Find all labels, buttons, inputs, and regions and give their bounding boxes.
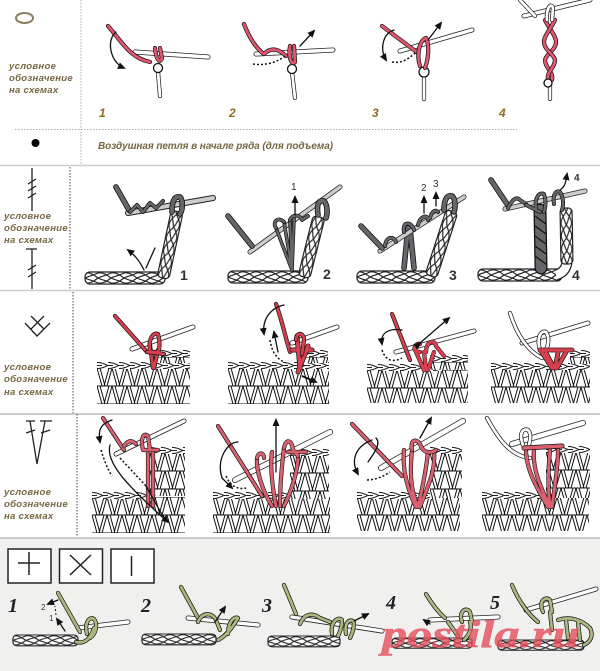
step number: 1: [8, 595, 18, 617]
step number: 1: [180, 267, 188, 283]
step number: 3: [449, 267, 457, 283]
step 1: [8, 593, 128, 646]
icon: double crochet symbols: [26, 168, 37, 289]
arrow labels: [421, 179, 439, 194]
panel: double crochet increase row: [0, 414, 600, 537]
caption: symbol on diagrams: условное: [3, 211, 52, 222]
icon: chain stitch oval symbol: [16, 13, 33, 23]
step number: 5: [490, 592, 500, 614]
step 4: [385, 592, 498, 648]
icon: two double crochets from one base: [26, 421, 52, 464]
caption: symbol on diagrams: на схемах: [4, 387, 54, 398]
panel: single crochet decrease row: [0, 290, 600, 414]
step 4: [491, 313, 590, 403]
arrow labels: 2: [421, 183, 427, 194]
caption: symbol on diagrams: обозначение: [9, 73, 73, 84]
caption: symbol on diagrams: на схемах: [4, 235, 54, 246]
caption: symbol on diagrams: на схемах: [4, 511, 54, 522]
arrow label: 1: [291, 182, 297, 193]
text: turning chain note: Воздушная петля в начале ряда (для подъема): [98, 141, 334, 152]
caption: symbol on diagrams: обозначение: [4, 374, 68, 385]
icon: turning chain dot: [32, 139, 40, 147]
icon: cross symbol box: [60, 549, 102, 583]
arrow labels: 1: [49, 614, 54, 623]
step number: 3: [372, 106, 379, 120]
panel: chain stitch row: [8, 0, 590, 165]
step 2: [213, 420, 330, 533]
panel: stitch symbols and single crochet steps: [0, 538, 600, 671]
step number: 4: [498, 106, 506, 120]
step number: 2: [323, 266, 331, 282]
arrow label: 4: [574, 173, 580, 184]
step 1: [97, 316, 193, 404]
step number: 1: [99, 106, 106, 120]
step 5: [490, 585, 596, 650]
arrow labels: 3: [433, 179, 439, 190]
step number: 4: [572, 267, 580, 283]
step 2: [228, 24, 333, 120]
step 1: [85, 187, 213, 284]
step 4: [478, 173, 585, 283]
step 2: [228, 182, 340, 283]
icon: plus symbol box: [8, 549, 51, 583]
icon: vertical bar symbol box: [111, 549, 154, 583]
step 2: [140, 587, 258, 645]
caption: symbol on diagrams: [3, 211, 68, 246]
step 4: [482, 418, 590, 531]
step 3: [261, 585, 382, 647]
step 3: [352, 418, 463, 531]
caption: symbol on diagrams: условное: [3, 487, 52, 498]
caption: symbol on diagrams: [3, 487, 68, 522]
caption: symbol on diagrams: обозначение: [4, 223, 68, 234]
step number: 2: [228, 106, 236, 120]
step 2: [228, 304, 337, 404]
watermark: postila.ru: [378, 613, 580, 656]
arrow labels: [41, 603, 54, 623]
step number: 2: [140, 595, 151, 617]
step number: 3: [261, 595, 272, 617]
step 4: [498, 0, 590, 120]
panel: double crochet on chain row: [0, 166, 600, 289]
step 1: [99, 26, 208, 120]
caption: symbol on diagrams: [3, 362, 68, 398]
step 3: [372, 23, 472, 120]
icon: increase symbol: [25, 316, 50, 336]
caption: symbol on diagrams: условное: [8, 61, 57, 72]
caption: symbol on diagrams: [8, 61, 73, 96]
step 3: [367, 314, 474, 403]
step 3: [357, 179, 464, 283]
arrow labels: 2: [41, 603, 46, 612]
caption: symbol on diagrams: условное: [3, 362, 52, 373]
caption: symbol on diagrams: на схемах: [9, 85, 59, 96]
step 1: [92, 418, 185, 533]
step number: 4: [385, 592, 396, 614]
caption: symbol on diagrams: обозначение: [4, 499, 68, 510]
